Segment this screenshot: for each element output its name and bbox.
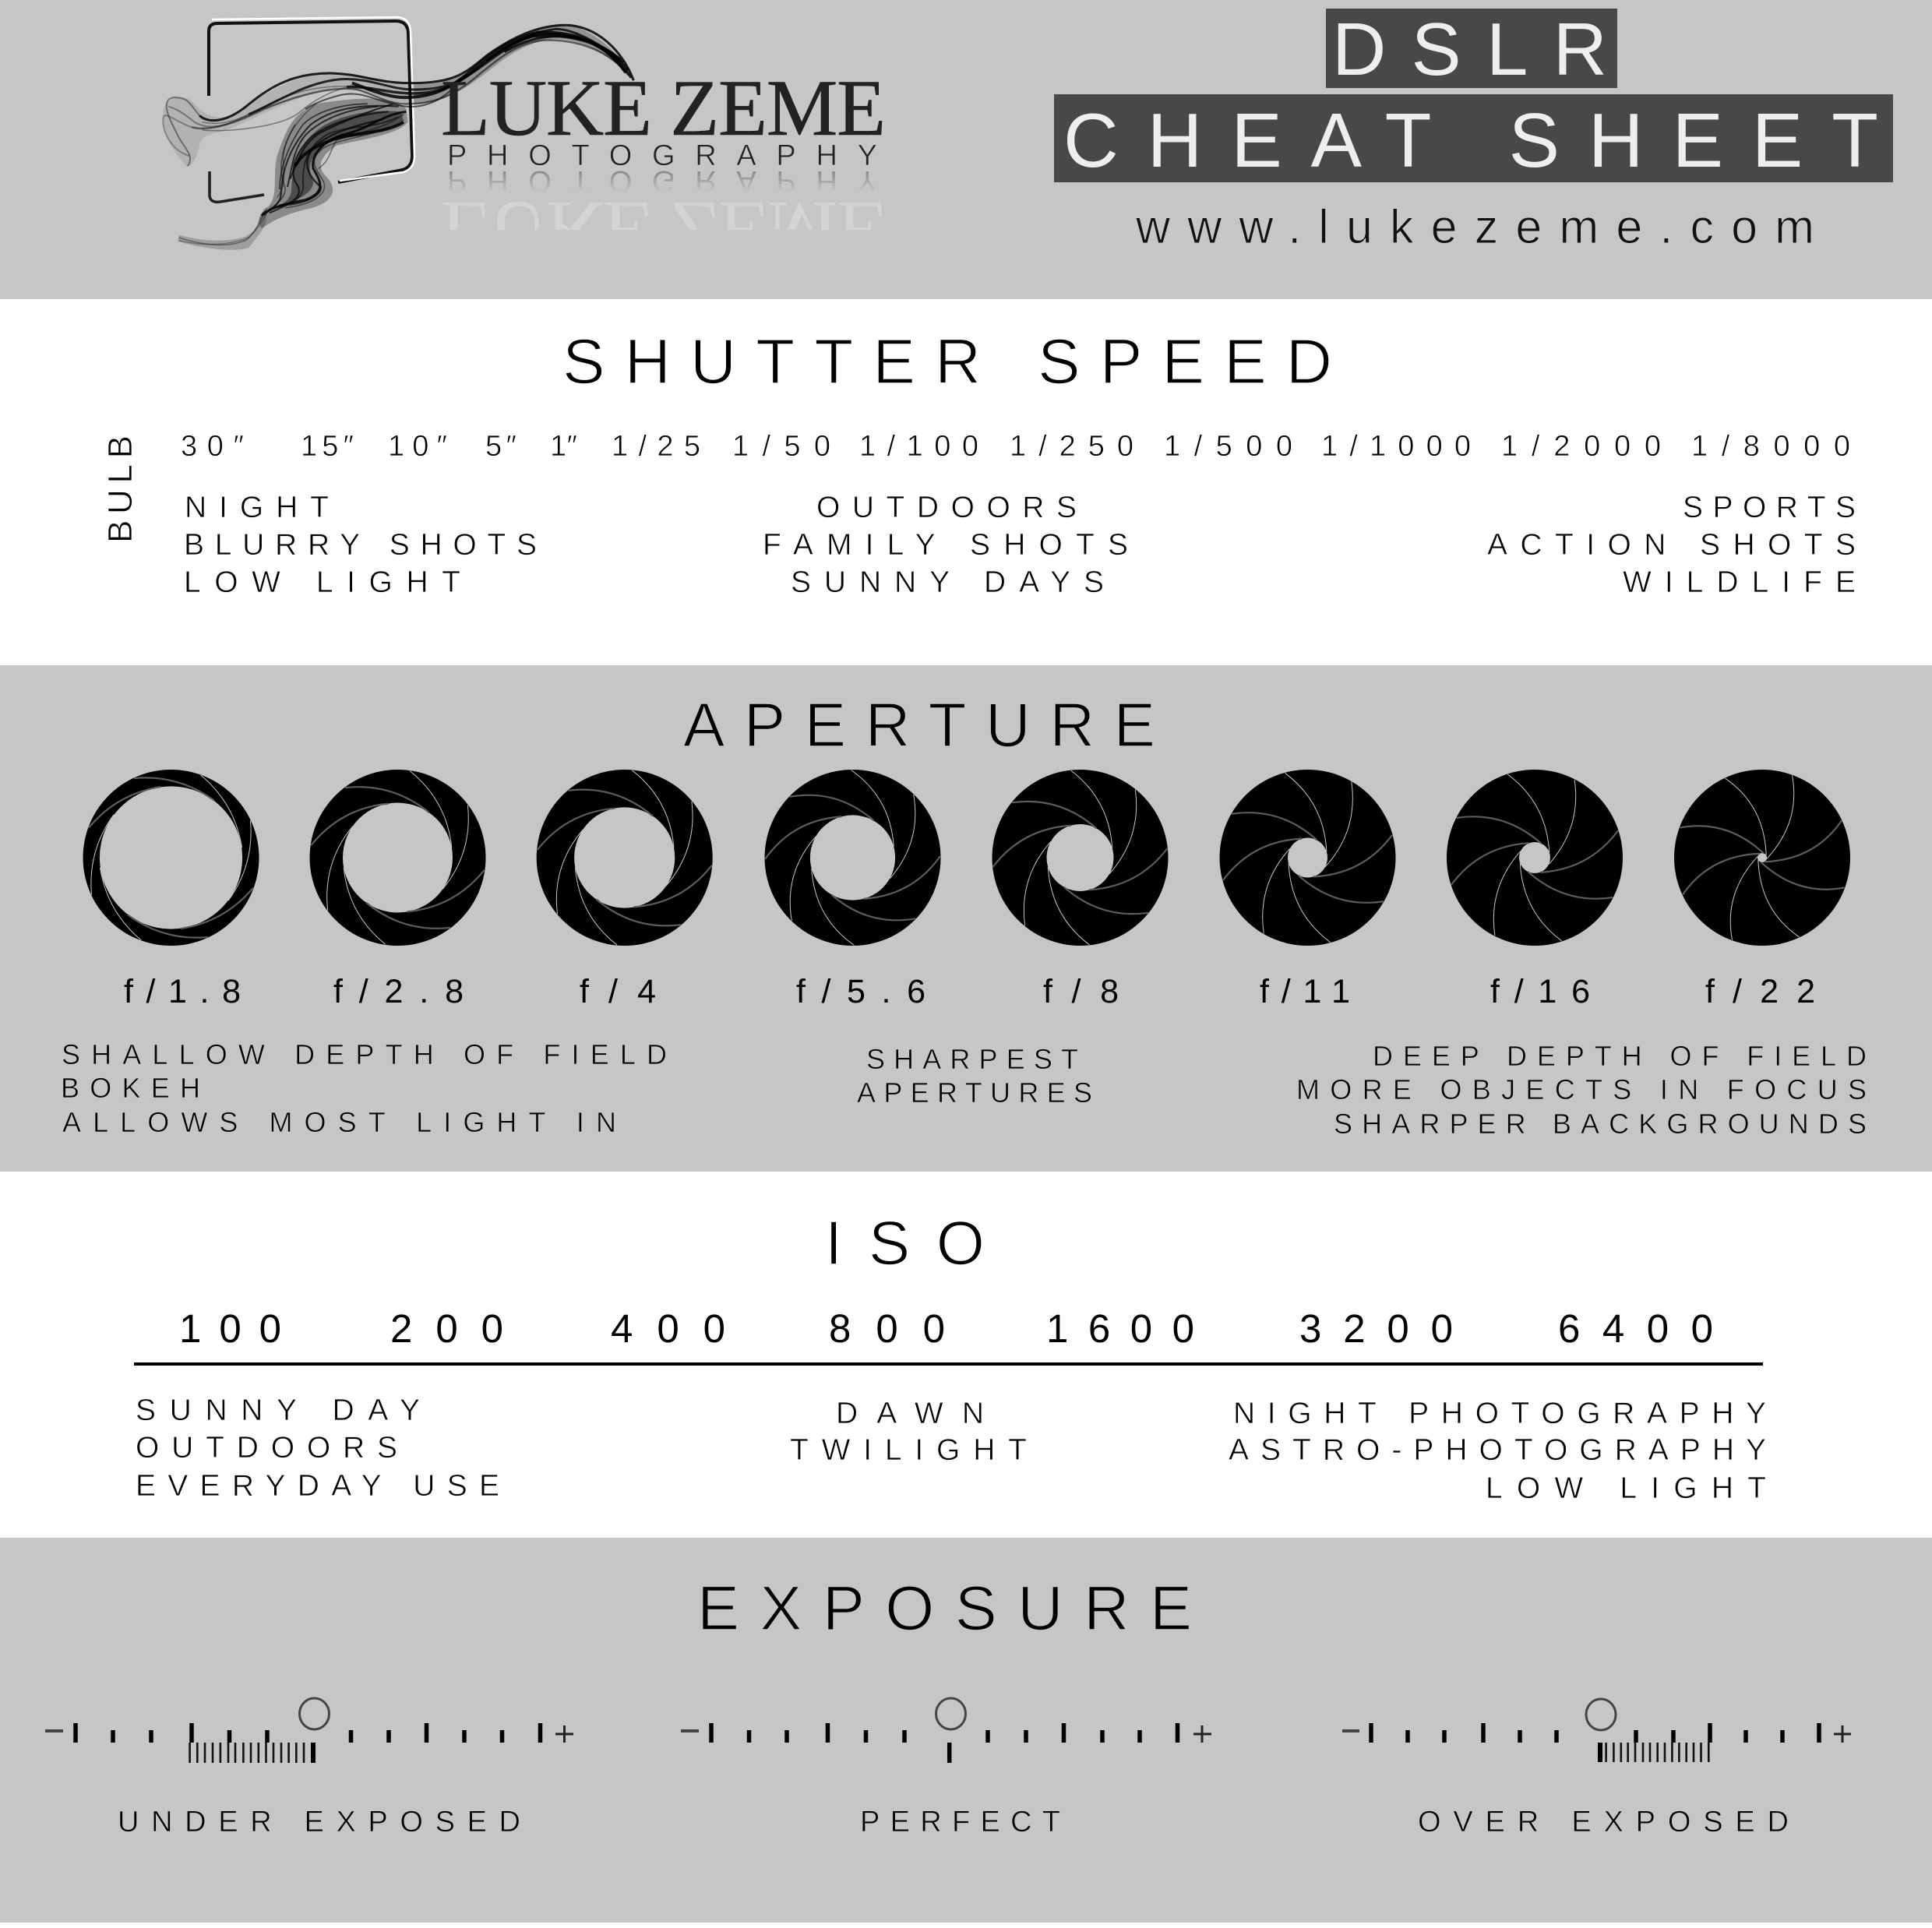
f-stop labels: f/4 <box>580 973 656 1010</box>
title box: CHEAT SHEET: CHEAT SHEET <box>1063 97 1878 183</box>
text block: mid ISO uses: TWILIGHT <box>790 1433 1027 1467</box>
text block: low ISO uses: EVERYDAY USE <box>136 1469 499 1503</box>
f-stop labels: f/22 <box>1705 973 1815 1010</box>
ISO values <box>179 1306 1713 1351</box>
icon: aperture f/1.8 <box>65 752 277 964</box>
text block: low ISO uses: SUNNY DAY <box>136 1394 420 1427</box>
logo wordmark: PHOTOGRAPHY: PHOTOGRAPHY <box>447 139 877 172</box>
ISO values: 3200 <box>1299 1306 1453 1351</box>
exposure meter: over exposed <box>1342 1699 1851 1762</box>
text block: high ISO uses: ASTRO-PHOTOGRAPHY <box>1229 1433 1766 1467</box>
text block: fast shutter uses: SPORTS <box>1683 491 1856 524</box>
text block: fast shutter uses <box>1487 491 1856 599</box>
heading: exposure: EXPOSURE <box>697 1574 1192 1644</box>
shutter speed scale: 1/25 <box>612 430 700 463</box>
icon: aperture f/8 <box>989 767 1171 948</box>
icon: aperture f/22 <box>1674 770 1850 946</box>
ISO values: 100 <box>179 1306 281 1351</box>
text block: narrow aperture effects: DEEP DEPTH OF FIELD <box>1373 1040 1867 1072</box>
label: over exposed: OVER EXPOSED <box>1418 1806 1789 1838</box>
panel: shutter speed <box>0 299 1932 665</box>
shutter speed scale: 1/250 <box>1010 430 1133 463</box>
ISO values: 1600 <box>1046 1306 1194 1351</box>
panel: exposure <box>0 1538 1932 1923</box>
text block: wide aperture effects: SHALLOW DEPTH OF FIELD <box>62 1038 667 1070</box>
ISO scale line <box>134 1362 1763 1366</box>
website url: www.lukezeme.com <box>1135 200 1814 253</box>
heading: ISO: ISO <box>825 1208 985 1278</box>
logo reflection: LUKE ZEME: LUKE ZEME <box>441 185 886 273</box>
text block: medium shutter uses <box>763 491 1128 599</box>
f-stop labels <box>124 973 1815 1010</box>
text block: medium shutter uses: FAMILY SHOTS <box>763 528 1128 562</box>
text block: wide aperture effects: BOKEH <box>61 1072 200 1104</box>
label: under exposed: UNDER EXPOSED <box>118 1806 520 1838</box>
panel: header <box>0 0 1932 299</box>
f-stop labels: f/5.6 <box>796 973 925 1010</box>
text block: medium shutter uses: SUNNY DAYS <box>791 566 1104 599</box>
text block: wide aperture effects <box>61 1038 667 1138</box>
shutter speed scale: 5″ <box>485 430 516 463</box>
text block: slow shutter uses: LOW LIGHT <box>184 566 460 599</box>
text block: high ISO uses: LOW LIGHT <box>1486 1472 1766 1505</box>
f-stop labels: f/2.8 <box>333 973 464 1010</box>
logo reflection: PHOTOGRAPHY: PHOTOGRAPHY <box>447 164 877 197</box>
icon: aperture f/4 <box>527 760 723 956</box>
text block: medium shutter uses: OUTDOORS <box>816 491 1077 524</box>
ISO values: 800 <box>829 1306 945 1351</box>
logo smoke <box>163 25 633 250</box>
icon: aperture f/16 <box>1445 768 1624 947</box>
text block: high ISO uses <box>1229 1397 1766 1505</box>
text block: slow shutter uses <box>184 491 537 599</box>
shutter speed scale <box>181 430 1850 463</box>
text block: narrow aperture effects <box>1296 1040 1867 1140</box>
shutter speed scale: 1/1000 <box>1321 430 1471 463</box>
exposure meter: perfect <box>681 1698 1211 1763</box>
logo wordmark: LUKE ZEME: LUKE ZEME <box>441 64 886 153</box>
text block: low ISO uses: OUTDOORS <box>136 1431 397 1465</box>
label: bulb: BULB <box>101 435 139 543</box>
text block: sharpest apertures: APERTURES <box>857 1077 1092 1109</box>
ISO values: 400 <box>611 1306 725 1351</box>
text block: sharpest apertures <box>857 1043 1092 1109</box>
panel: aperture <box>0 665 1932 1172</box>
ISO values: 200 <box>390 1306 503 1351</box>
shutter speed scale: 15″ <box>301 430 354 463</box>
text block: slow shutter uses: NIGHT <box>185 491 329 524</box>
text block: low ISO uses <box>136 1394 499 1503</box>
icon: aperture f/5.6 <box>762 767 943 948</box>
text block: sharpest apertures: SHARPEST <box>866 1043 1078 1075</box>
text block: mid ISO uses <box>790 1397 1027 1467</box>
text block: wide aperture effects: ALLOWS MOST LIGHT IN <box>62 1106 616 1138</box>
label: perfect: PERFECT <box>860 1806 1060 1838</box>
ISO values: 6400 <box>1558 1306 1713 1351</box>
text block: narrow aperture effects: SHARPER BACKGROUNDS <box>1334 1108 1867 1140</box>
text block: high ISO uses: NIGHT PHOTOGRAPHY <box>1233 1397 1766 1430</box>
exposure meter: under exposed <box>45 1698 573 1763</box>
text block: fast shutter uses: ACTION SHOTS <box>1487 528 1856 562</box>
heading: aperture: APERTURE <box>683 690 1155 760</box>
shutter speed scale: 1″ <box>550 430 577 463</box>
heading: shutter speed: SHUTTER SPEED <box>562 326 1332 397</box>
icon: aperture f/11 <box>1217 767 1398 948</box>
shutter speed scale: 10″ <box>388 430 447 463</box>
f-stop labels: f/8 <box>1043 973 1119 1010</box>
shutter speed scale: 1/100 <box>859 430 978 463</box>
f-stop labels: f/11 <box>1260 973 1350 1010</box>
logo frame <box>209 17 414 202</box>
shutter speed scale: 1/2000 <box>1501 430 1661 463</box>
text block: slow shutter uses: BLURRY SHOTS <box>184 528 537 562</box>
title box: DSLR: DSLR <box>1332 8 1607 91</box>
text block: fast shutter uses: WILDLIFE <box>1623 566 1856 599</box>
icon: aperture f/2.8 <box>296 756 499 959</box>
shutter speed scale: 1/500 <box>1164 430 1292 463</box>
shutter speed scale: 1/8000 <box>1691 430 1850 463</box>
f-stop labels: f/1.8 <box>124 973 241 1010</box>
panel: ISO <box>0 1172 1932 1538</box>
shutter speed scale: 1/50 <box>732 430 830 463</box>
shutter speed scale: 30″ <box>181 430 244 463</box>
text block: mid ISO uses: DAWN <box>836 1397 984 1430</box>
text block: narrow aperture effects: MORE OBJECTS IN FOCUS <box>1296 1073 1867 1105</box>
f-stop labels: f/16 <box>1490 973 1590 1010</box>
logo: Luke Zeme Photography <box>163 17 886 273</box>
